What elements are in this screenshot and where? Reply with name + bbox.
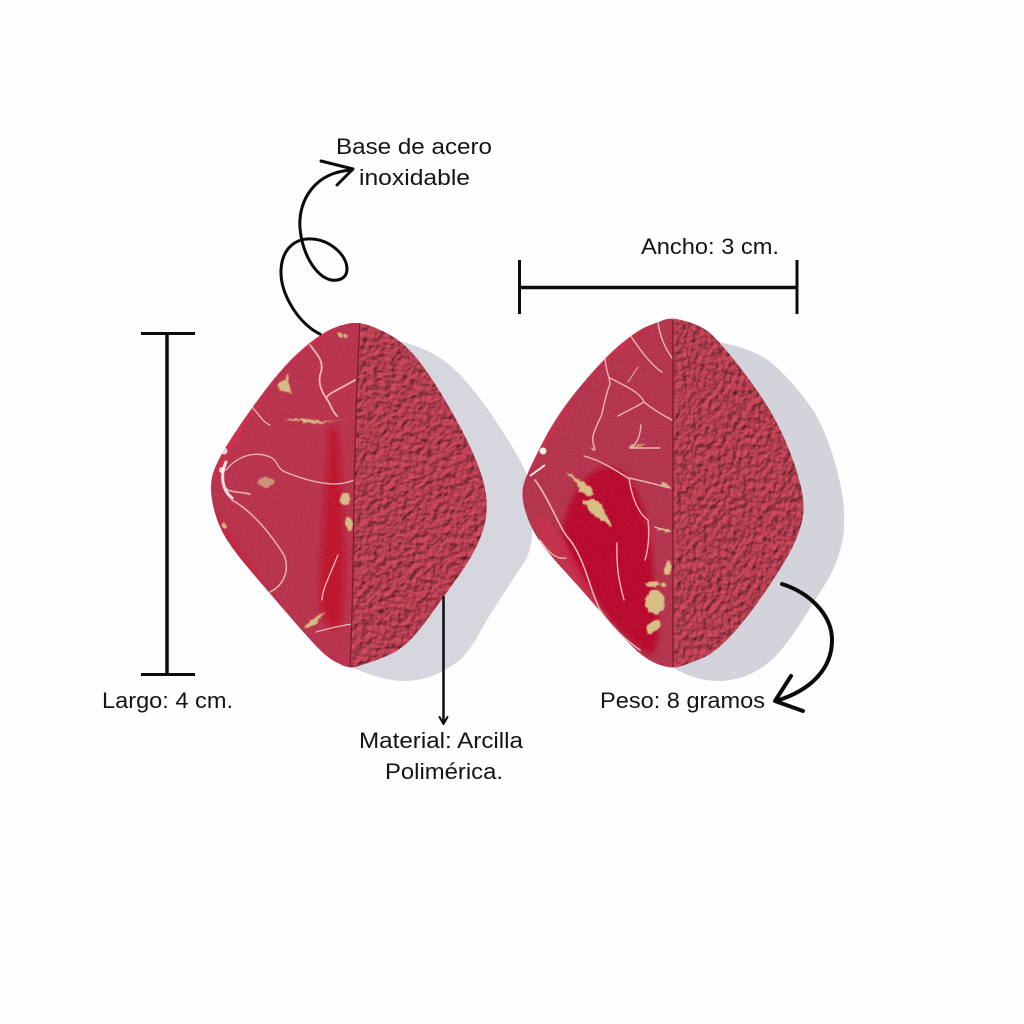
left earring: [200, 315, 532, 681]
label: polymer: Polimérica.: [385, 759, 503, 784]
label: length: Largo: 4 cm.: [102, 688, 233, 713]
right earring: [515, 315, 844, 681]
left earring textured half: [350, 323, 487, 668]
left earring marbled half: [200, 318, 365, 673]
arrow: weight: [775, 584, 832, 711]
right earring marbled half: [515, 315, 674, 670]
arrow: steel base: [281, 161, 353, 334]
label: material: Material: Arcilla: [359, 728, 524, 753]
height dimension line: [141, 334, 195, 675]
width dimension line: [520, 260, 797, 314]
label: steel base: Base de acero: [336, 134, 492, 159]
label: width: Ancho: 3 cm.: [641, 234, 779, 259]
label: stainless: inoxidable: [359, 165, 470, 190]
label: weight: Peso: 8 gramos: [600, 688, 765, 713]
arrow: material: [440, 597, 448, 724]
right earring shadow: [672, 340, 844, 681]
right earring textured half: [673, 315, 808, 671]
left earring shadow: [350, 340, 532, 681]
